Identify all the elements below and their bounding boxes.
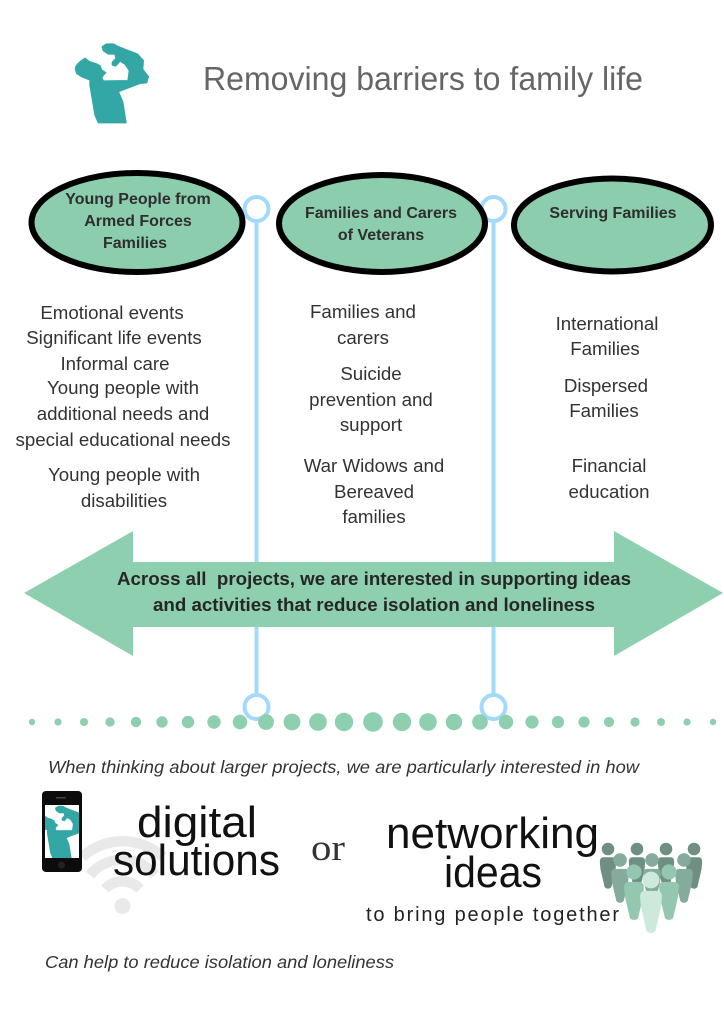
heading oval: serving families [514,178,711,272]
timeline connector: left [244,197,268,719]
double-headed arrow callout: and activities that reduce isolation and loneliness [153,594,595,615]
text block: families and carers topics: families [342,506,406,527]
intro sentence: When thinking about larger projects, we are particularly interested in how [48,757,640,777]
text block: serving families topics: education [568,481,650,502]
text block: families and carers topics: carers [337,327,389,348]
heading oval: families and carers: of Veterans [338,227,424,244]
heading oval: families and carers [279,175,485,272]
text block: young people topics: Emotional events [40,302,184,323]
heading oval: young people [32,173,242,272]
text block: young people topics: Young people with [47,377,199,398]
icon: smartphone [42,791,82,872]
icon: wifi [82,841,163,914]
dotted divider [29,712,716,732]
heading: networking ideas [386,809,599,897]
text block: families and carers topics: War Widows and [304,455,444,476]
title: Removing barriers to family life [203,60,643,97]
heading: networking ideas: networking [386,809,599,858]
heading: digital solutions: digital [137,798,257,847]
heading oval: young people: Armed Forces [84,213,192,230]
double-headed arrow callout [24,531,723,656]
heading: digital solutions [113,798,280,885]
text block: serving families topics: Families [570,338,640,359]
heading: digital solutions: solutions [113,836,280,885]
heading oval: young people: Families [103,235,167,252]
text block: serving families topics: Dispersed [564,375,648,396]
timeline connector: right [482,197,506,719]
icon: group of people [600,843,702,933]
closing sentence: Can help to reduce isolation and loneliness [45,952,394,972]
text block: serving families topics: Financial [572,455,646,476]
text block: young people topics: disabilities [81,490,167,511]
text block: young people topics: Significant life events [26,327,202,348]
heading oval: serving families: Serving Families [549,205,677,222]
text block: young people topics: Young people with [48,464,200,485]
icon: parent lifting child [75,44,148,123]
tagline: to bring people together [366,904,619,926]
text block: families and carers topics: prevention and [309,389,433,410]
text block: young people topics: Informal care [60,353,170,374]
double-headed arrow callout: Across all projects, we are interested in supporting ideas [117,568,631,589]
text block: young people topics: additional needs and [37,403,209,424]
text block: young people topics: special educational needs [15,429,231,450]
heading oval: families and carers: Families and Carers [305,205,457,222]
text block: serving families topics: Families [569,400,639,421]
text block: families and carers topics: Families and [310,301,416,322]
text block: families and carers topics: Bereaved [334,481,414,502]
text block: families and carers topics: support [340,414,403,435]
word: or: or [311,828,345,869]
heading oval: young people: Young People from [65,191,211,208]
text block: families and carers topics: Suicide [340,363,402,384]
text block: serving families topics: International [556,313,658,334]
heading: networking ideas: ideas [444,848,542,897]
